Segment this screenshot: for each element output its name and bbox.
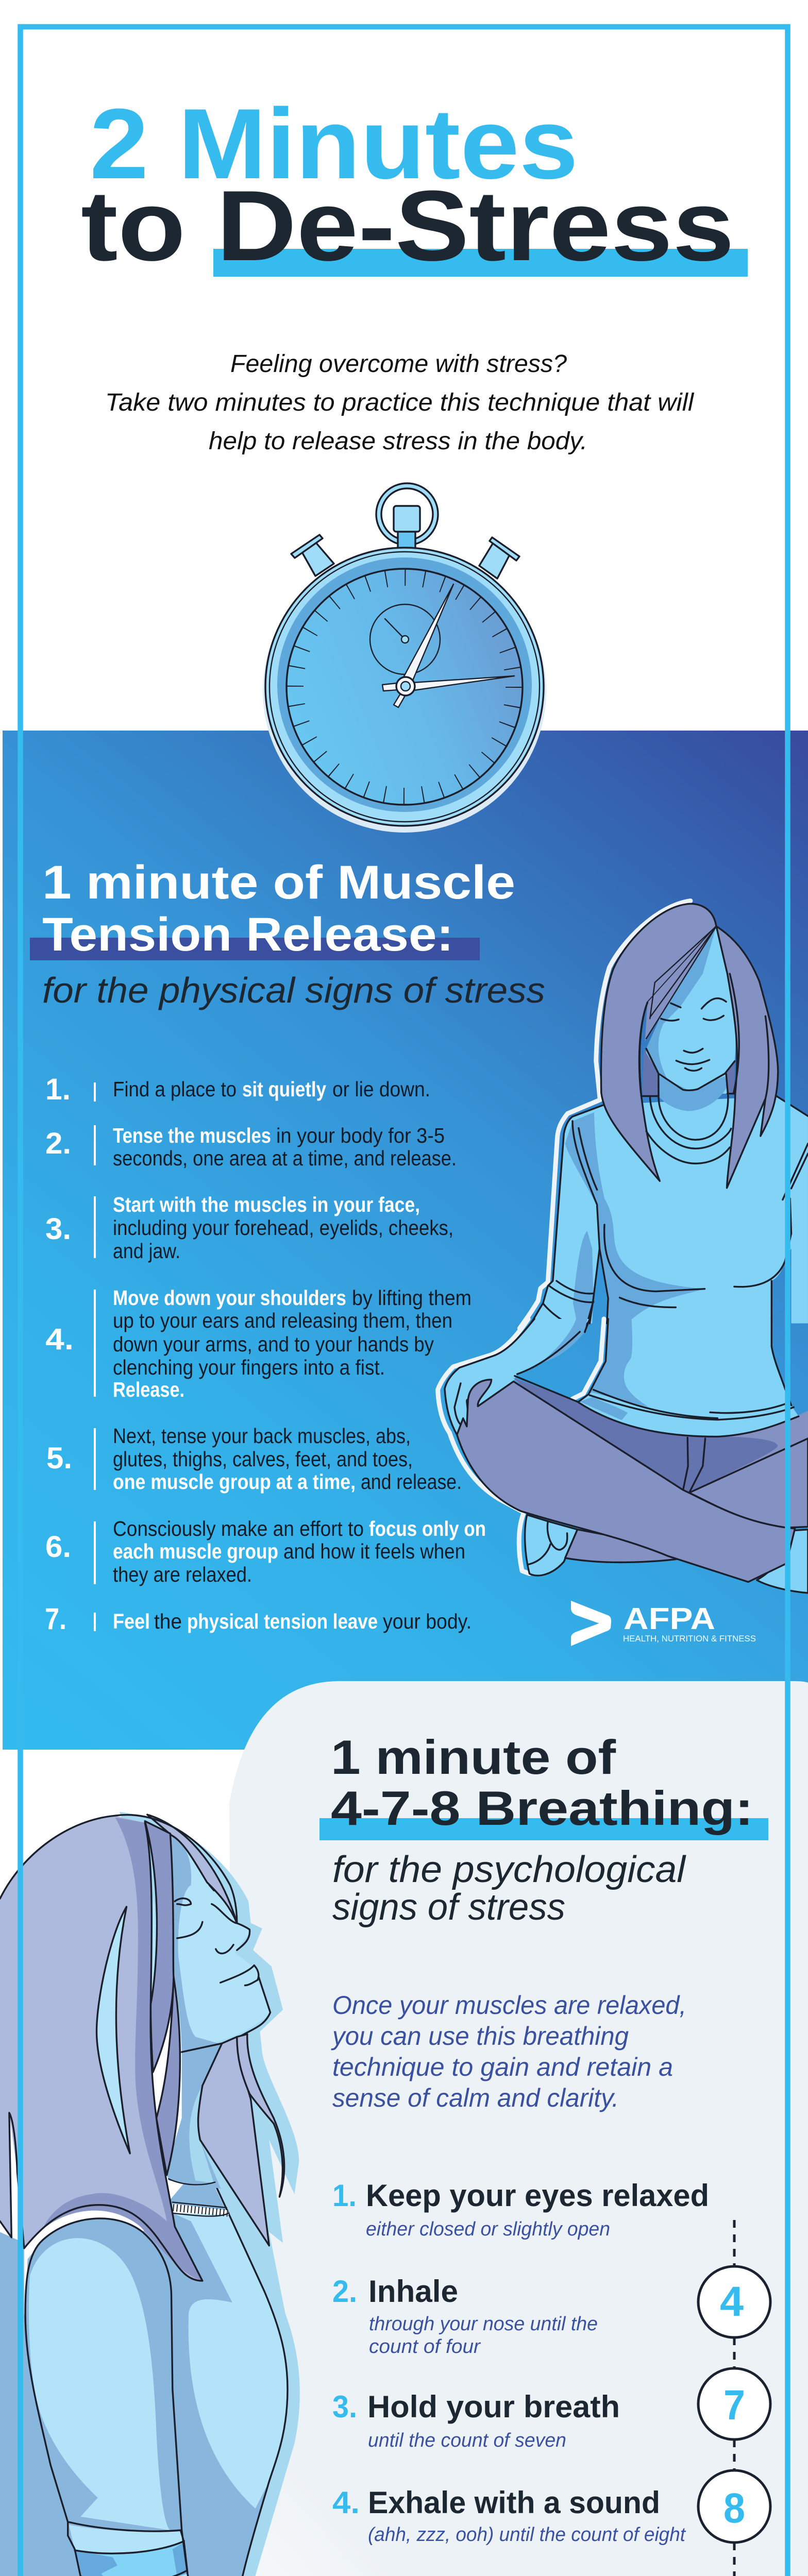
heading: muscle tension release: 1 minute of Muscle (42, 856, 515, 909)
step 4: clenching your fingers into a fist. (113, 1355, 385, 1379)
step 5 (46, 1424, 462, 1494)
breathing step 3: Hold your breath (367, 2389, 620, 2424)
step 3: including your forehead, eyelids, cheeks, (113, 1216, 453, 1240)
step 2 (45, 1124, 457, 1170)
step 1: or lie down. (332, 1077, 430, 1101)
timeline: breath counts 4-7-8: 7 (723, 2382, 745, 2429)
list: breathing steps (332, 2178, 709, 2576)
subheading: psychological signs: for the psychological (332, 1849, 686, 1890)
step 4 (45, 1286, 472, 1401)
step 1: sit quietly (242, 1077, 326, 1101)
breathing step 3: 3. (332, 2389, 357, 2424)
breathing step 3 (332, 2389, 620, 2451)
step 7: the (154, 1609, 182, 1633)
breathing step 4: 4. (332, 2485, 360, 2520)
upper body (519, 901, 808, 1332)
step 3: and jaw. (113, 1239, 180, 1263)
lower body and legs (438, 1319, 808, 1593)
step 1: Find a place to (113, 1077, 237, 1101)
logo: AFPA white: HEALTH, NUTRITION & FITNESS (623, 1634, 756, 1643)
breathing step 2: through your nose until the (369, 2313, 598, 2335)
step 4: by lifting them (352, 1286, 472, 1310)
step 6: Consciously make an effort to (113, 1517, 364, 1540)
step 5: Next, tense your back muscles, abs, (113, 1424, 411, 1448)
heading: 4-7-8 breathing: 1 minute of (331, 1730, 616, 1784)
step 4: down your arms, and to your hands by (113, 1332, 434, 1356)
intro text: Take two minutes to practice this technique that will (105, 389, 694, 416)
step 6: focus only on (369, 1517, 486, 1540)
icon: stopwatch (263, 483, 546, 833)
breathing step 1: 1. (332, 2178, 357, 2213)
step 7: physical tension leave (187, 1609, 378, 1633)
text block: breathing intro: technique to gain and retain a (332, 2053, 673, 2081)
step 3: 3. (45, 1212, 71, 1246)
step 1 (45, 1073, 430, 1106)
intro text: help to release stress in the body. (209, 428, 587, 455)
subheading: physical signs: for the physical signs of stress (42, 970, 545, 1010)
logo: AFPA white (571, 1601, 756, 1646)
step 2: seconds, one area at a time, and release. (113, 1146, 457, 1170)
step 5: and release. (361, 1470, 462, 1494)
step 7: 7. (45, 1602, 66, 1636)
breathing step 1 (332, 2178, 709, 2240)
timeline: breath counts 4-7-8 (698, 2220, 770, 2576)
step 7 (45, 1602, 472, 1636)
heading: muscle tension release: Tension Release: (42, 908, 453, 961)
subheading: psychological signs (332, 1849, 686, 1928)
step 6 (45, 1517, 486, 1586)
illustration: meditating woman (438, 901, 808, 1593)
heading: 4-7-8 breathing: 4-7-8 Breathing: (331, 1781, 753, 1835)
step 4: Release. (113, 1378, 184, 1401)
panel: muscle tension release background (3, 731, 808, 1750)
breathing step 4: Exhale with a sound (368, 2485, 660, 2520)
step 6: they are relaxed. (113, 1563, 252, 1586)
step 1: 1. (45, 1073, 71, 1106)
step 6: and how it feels when (283, 1539, 465, 1563)
step 6: 6. (45, 1530, 71, 1564)
text block: breathing intro: you can use this breathing (331, 2022, 629, 2050)
step 4: 4. (45, 1323, 74, 1356)
list: muscle release steps (45, 1073, 486, 1636)
step 3 (45, 1193, 453, 1263)
step 2: 2. (45, 1127, 71, 1160)
step 5: glutes, thighs, calves, feet, and toes, (113, 1447, 413, 1471)
logo: AFPA white: AFPA (624, 1602, 715, 1636)
step 3: Start with the muscles in your face, (113, 1193, 420, 1216)
intro text (105, 350, 694, 455)
step 4: up to your ears and releasing them, then (113, 1309, 452, 1332)
breathing step 2: count of four (369, 2336, 481, 2358)
text block: breathing intro: Once your muscles are relaxed, (332, 1991, 686, 2020)
timeline: breath counts 4-7-8: 4 (720, 2278, 744, 2325)
heading: 4-7-8 breathing (319, 1730, 768, 1840)
step 5: 5. (46, 1442, 72, 1475)
breathing step 4: (ahh, zzz, ooh) until the count of eight (368, 2524, 686, 2546)
panel: 4-7-8 breathing background (229, 1681, 808, 2576)
step 5: one muscle group at a time, (113, 1470, 356, 1494)
breathing step 4 (332, 2485, 686, 2546)
step 7: your body. (383, 1609, 472, 1633)
step 2: Tense the muscles (113, 1124, 271, 1147)
breathing step 2: Inhale (368, 2274, 458, 2309)
subheading: psychological signs: signs of stress (332, 1887, 565, 1928)
breathing step 2: 2. (332, 2274, 357, 2309)
step 7: Feel (113, 1609, 150, 1633)
breathing step 1: Keep your eyes relaxed (366, 2178, 709, 2213)
timeline: breath counts 4-7-8: 8 (723, 2485, 745, 2532)
step 2: in your body for 3-5 (276, 1124, 445, 1147)
step 4: Move down your shoulders (113, 1286, 346, 1310)
text block: breathing intro: sense of calm and clarity. (332, 2083, 619, 2112)
breathing step 2 (332, 2274, 598, 2358)
intro text: Feeling overcome with stress? (230, 350, 567, 378)
title: 2 Minutes (90, 88, 578, 200)
step 6: each muscle group (113, 1539, 278, 1563)
title (81, 88, 748, 282)
breathing step 1: either closed or slightly open (366, 2218, 610, 2240)
title: to De-Stress (81, 170, 734, 282)
text block: breathing intro (331, 1991, 686, 2112)
illustration: woman in profile breathing (0, 1812, 300, 2576)
breathing step 3: until the count of seven (368, 2430, 566, 2451)
heading: muscle tension release (30, 856, 515, 961)
